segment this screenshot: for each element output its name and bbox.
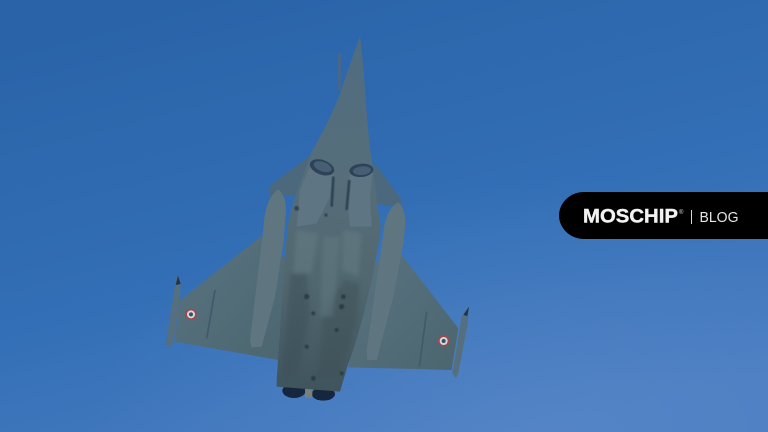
blog label: BLOG [700, 209, 738, 226]
dark spots [294, 206, 346, 381]
badge background [559, 192, 768, 239]
left fuel tank [250, 189, 286, 347]
logo wordmark: MOSCHIP [583, 206, 678, 228]
left roundel [185, 309, 197, 320]
right wingtip tip [463, 307, 469, 316]
left wingtip tip [176, 276, 181, 285]
right intake [347, 163, 374, 227]
right fuel tank [367, 202, 405, 360]
left wing [175, 236, 290, 360]
left wingtip rail [166, 276, 181, 347]
right wing fence [419, 312, 427, 367]
registered mark: ® [679, 209, 684, 216]
fuselage light centre panels [293, 230, 362, 317]
fuselage rear dark weathering [282, 273, 360, 380]
intake divider shadows [332, 177, 349, 210]
badge: MosChip blog [559, 192, 768, 239]
left canard [269, 156, 310, 197]
left wing fence [207, 290, 215, 338]
right wingtip rail [452, 307, 469, 378]
right wing [348, 255, 458, 370]
fighter jet [166, 36, 469, 401]
fuselage [277, 36, 381, 392]
right canard [372, 162, 402, 208]
pitot probe [338, 53, 341, 90]
right roundel [438, 335, 449, 347]
separator [691, 210, 692, 224]
left intake [297, 156, 336, 227]
engine nozzles [282, 383, 335, 401]
